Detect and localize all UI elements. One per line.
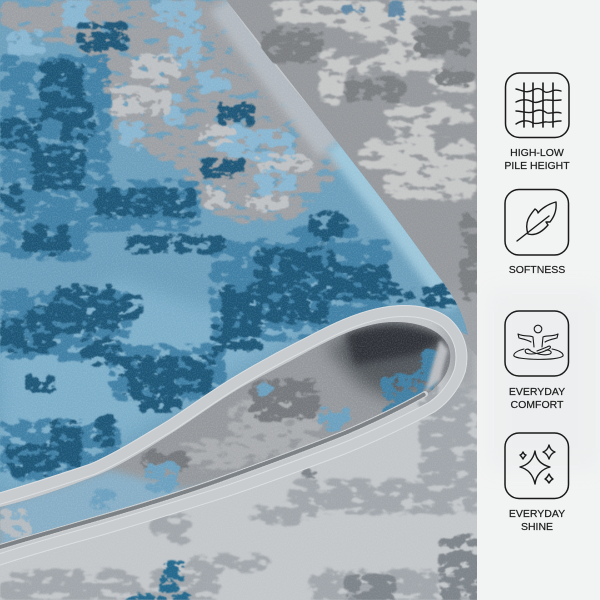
- icon: feather: [505, 190, 568, 255]
- mid blue patches: [0, 55, 390, 480]
- dark blue patches: [0, 22, 457, 477]
- label: everyday comfort: [509, 386, 565, 411]
- feature: high-low pile height: [504, 73, 570, 172]
- rug underside: [0, 322, 450, 544]
- light grey raised patches: [108, 52, 314, 214]
- label: high-low pile height: PILE HEIGHT: [504, 160, 570, 172]
- feature: everyday comfort: [505, 311, 568, 411]
- rug top surface: [0, 0, 480, 500]
- label: everyday shine: EVERYDAY: [509, 508, 565, 520]
- icon: pile fibres: [506, 73, 569, 138]
- label: everyday comfort: EVERYDAY: [509, 386, 565, 398]
- light blue patches: [8, 0, 295, 195]
- label: softness: SOFTNESS: [509, 264, 565, 276]
- label: everyday shine: [509, 508, 565, 533]
- side panel: [477, 0, 600, 600]
- background: floor rug: [0, 0, 480, 600]
- label: high-low pile height: [504, 147, 570, 172]
- icon: sparkles: [505, 433, 568, 498]
- rug binding edge: [0, 311, 461, 561]
- label: high-low pile height: HIGH-LOW: [510, 147, 564, 159]
- feature: everyday shine: [505, 433, 568, 533]
- grey worn upper area: [0, 0, 345, 225]
- label: everyday comfort: COMFORT: [511, 399, 564, 411]
- icon: meditating figure: [505, 311, 568, 376]
- feature: softness: [505, 190, 568, 276]
- label: everyday shine: SHINE: [521, 521, 553, 533]
